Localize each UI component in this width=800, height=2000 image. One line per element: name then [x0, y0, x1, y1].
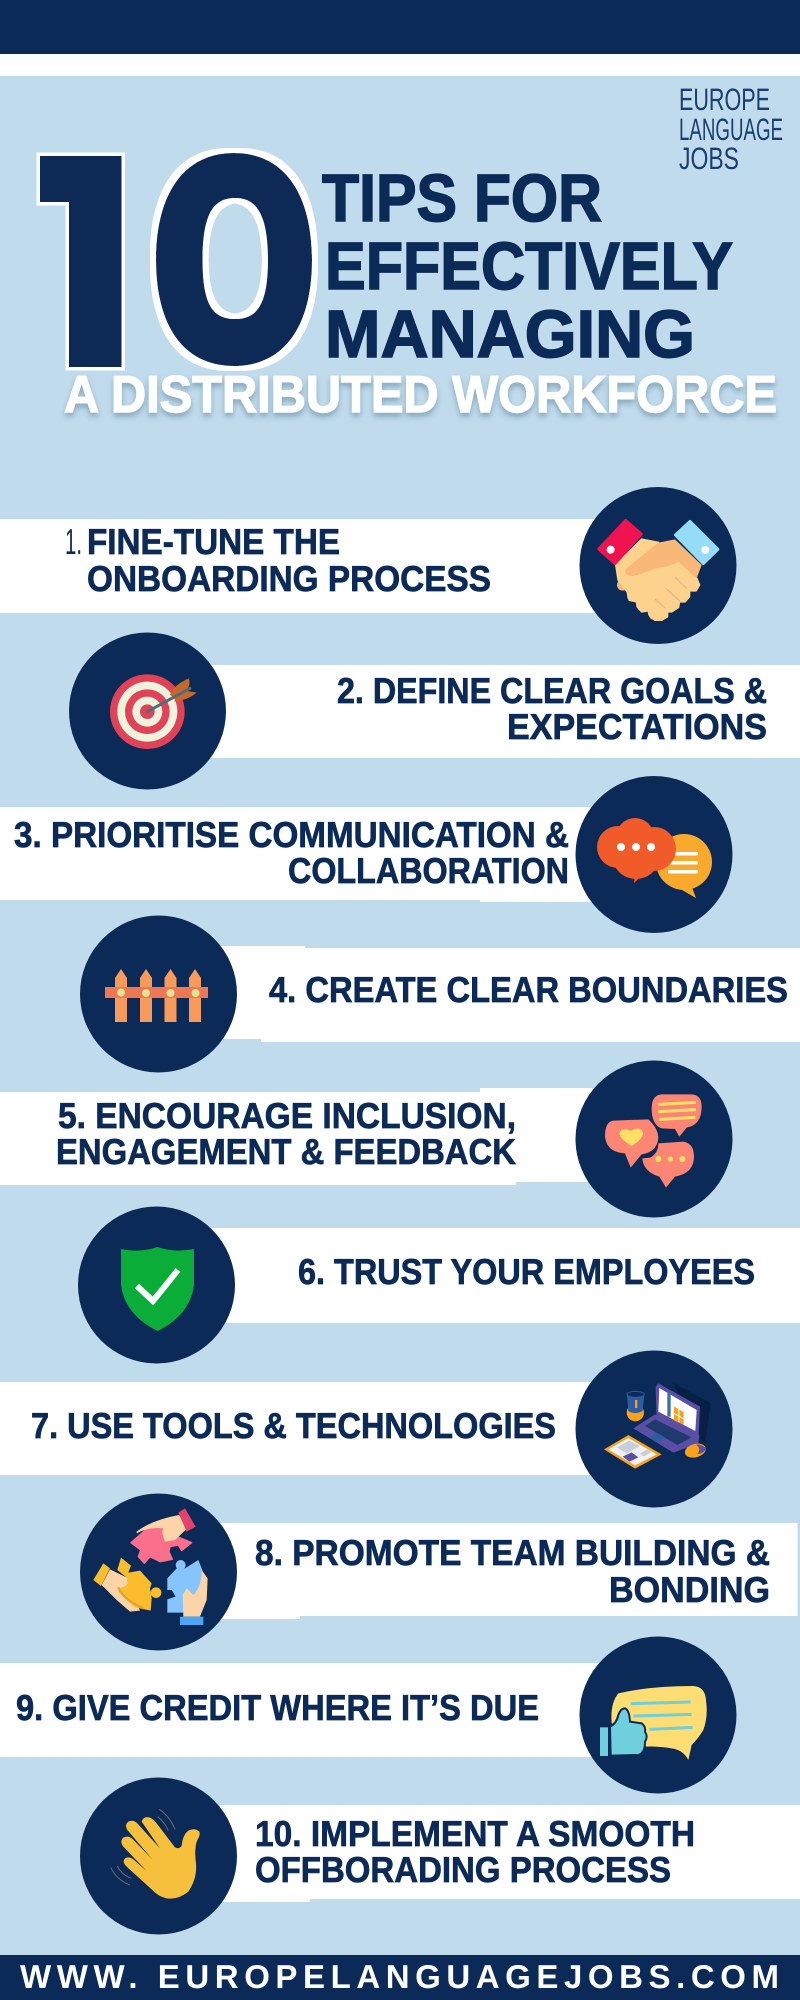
- tip 2 text: EXPECTATIONS: [507, 706, 767, 747]
- circle 8: [80, 1494, 237, 1650]
- icon: fence: [105, 969, 208, 1022]
- tip 1 text: FINE-TUNE THE: [87, 521, 340, 562]
- icon: target with arrow: [110, 674, 197, 749]
- tip 9 text: 9. GIVE CREDIT WHERE IT’S DUE: [16, 1687, 539, 1728]
- tip 8 text: BONDING: [609, 1569, 770, 1610]
- band 1: [0, 519, 600, 613]
- icon: shield with check: [121, 1247, 194, 1331]
- icon: puzzle hands: [93, 1508, 208, 1625]
- logo: Europe Language Jobs: JOBS: [679, 141, 739, 176]
- big number 10: 0: [154, 107, 314, 413]
- tip 2: [69, 632, 800, 790]
- tip 9: [0, 1636, 736, 1794]
- tip 2 text: [337, 670, 767, 747]
- tip 10 text: OFFBORADING PROCESS: [255, 1849, 671, 1890]
- tip 1: [0, 487, 736, 644]
- logo: Europe Language Jobs: [679, 82, 783, 176]
- tip 10 text: 10. IMPLEMENT A SMOOTH: [255, 1813, 695, 1854]
- band 8: [215, 1523, 798, 1619]
- band 7: [0, 1382, 600, 1475]
- circle 6: [78, 1206, 235, 1364]
- tip 5 text: ENGAGEMENT & FEEDBACK: [56, 1131, 516, 1172]
- circle 2: [69, 632, 226, 790]
- tip 3 text: COLLABORATION: [288, 850, 569, 891]
- tip 6: [78, 1206, 800, 1364]
- icon: waving hand: [111, 1809, 200, 1899]
- tip 5 text: [56, 1095, 516, 1172]
- tip 8: [80, 1494, 798, 1650]
- big number 10: 1: [8, 86, 180, 433]
- band 9: [0, 1663, 600, 1757]
- tip 3 text: 3. PRIORITISE COMMUNICATION &: [14, 814, 569, 855]
- icon: chat bubbles with heart: [605, 1094, 702, 1188]
- tip 4: [80, 916, 800, 1072]
- tip 10 text: [255, 1813, 695, 1890]
- tip 3: [0, 776, 732, 933]
- tip 6 text: 6. TRUST YOUR EMPLOYEES: [298, 1251, 755, 1292]
- circle 7: [576, 1350, 732, 1508]
- footer website url: WWW. EUROPELANGUAGEJOBS.COM: [20, 1958, 779, 1995]
- tip 7: [0, 1350, 732, 1508]
- icon: laptop, tablet, cup and mouse: [604, 1383, 711, 1469]
- circle 4: [80, 916, 237, 1072]
- circle 9: [580, 1636, 736, 1794]
- title: tips for effectively managing: MANAGING: [325, 297, 695, 372]
- tip 5: [0, 1060, 732, 1218]
- tip 1 text: ONBOARDING PROCESS: [87, 558, 491, 599]
- big number 10: [36, 148, 318, 371]
- circle 3: [576, 776, 732, 933]
- circle 10: [80, 1778, 237, 1934]
- tip 7 text: 7. USE TOOLS & TECHNOLOGIES: [31, 1405, 556, 1446]
- band 6: [200, 1228, 800, 1323]
- tip 1 text: [65, 521, 491, 599]
- tip 8 text: [255, 1532, 770, 1610]
- top navy bar: [0, 0, 800, 54]
- tip 10: [80, 1778, 800, 1934]
- band 2: [200, 665, 800, 758]
- title: tips for effectively managing: TIPS FOR: [322, 161, 602, 236]
- bottom navy bar: [0, 1955, 800, 2000]
- tip 3 text: [14, 814, 569, 891]
- tip 1 text: 1.: [65, 521, 82, 562]
- icon: thumbs up and speech bubble: [600, 1686, 707, 1760]
- tip 8 text: 8. PROMOTE TEAM BUILDING &: [255, 1532, 770, 1573]
- band 4: [215, 946, 800, 1042]
- circle 1: [580, 487, 736, 644]
- band 5: [0, 1088, 600, 1185]
- icon: speech bubbles: [597, 818, 712, 898]
- title: tips for effectively managing: [322, 161, 733, 372]
- band 10: [220, 1805, 800, 1902]
- circle 5: [576, 1060, 732, 1218]
- icon: handshake: [599, 521, 718, 620]
- tip 5 text: 5. ENCOURAGE INCLUSION,: [58, 1095, 516, 1136]
- band 3: [0, 807, 600, 902]
- title: tips for effectively managing: EFFECTIVELY: [325, 229, 733, 304]
